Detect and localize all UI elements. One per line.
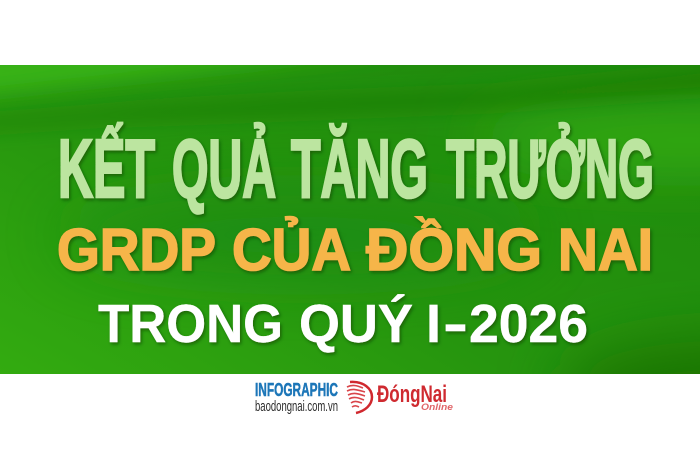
- title line 2: CỦA: [232, 216, 351, 283]
- footer logo: [255, 380, 454, 415]
- title line 2: GRDP: [57, 217, 216, 283]
- title line 3: [98, 294, 588, 354]
- title line 1: TĂNG: [291, 122, 428, 215]
- infographic cover: [0, 65, 700, 414]
- title line 1: [58, 121, 654, 215]
- title line 3: 2026: [469, 294, 588, 354]
- title line 1: KẾT: [58, 122, 155, 215]
- label: website: baodongnai.com.vn: [255, 398, 338, 415]
- title line 2: NAI: [558, 217, 653, 283]
- title line 3: -: [443, 294, 468, 354]
- label: infographic: INFOGRAPHIC: [255, 380, 338, 400]
- title line 1: QUẢ: [172, 121, 276, 215]
- title line 2: [57, 216, 653, 283]
- icon: newspaper flag: [347, 382, 372, 413]
- title line 3: I: [426, 294, 441, 354]
- green banner: [0, 65, 700, 374]
- title line 2: ĐỒNG: [366, 217, 542, 283]
- title line 3: QUÝ: [299, 294, 413, 354]
- wordmark: Dong Nai: ĐóngNai: [377, 381, 447, 408]
- title line 3: TRONG: [98, 294, 283, 354]
- wordmark: Online: Online: [421, 402, 454, 413]
